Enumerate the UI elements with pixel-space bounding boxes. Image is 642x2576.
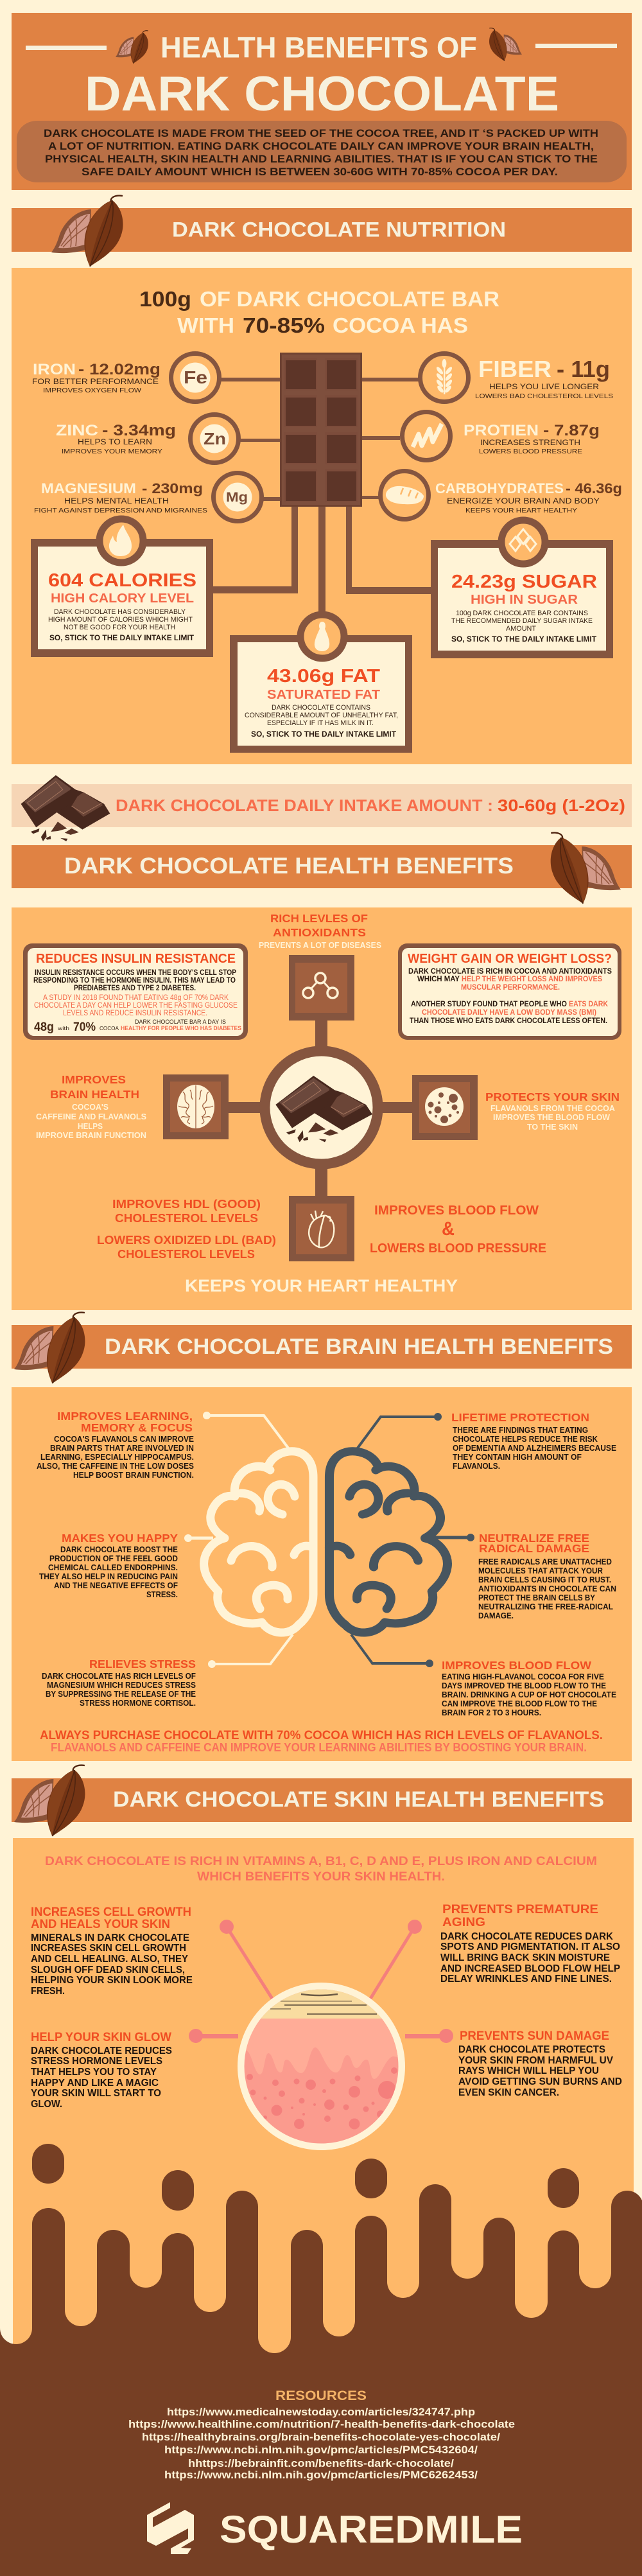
callout: fat: DARK CHOCOLATE CONTAINS: [272, 704, 370, 712]
magnesium text: MAGNESIUM: [41, 480, 136, 496]
cholesterol text: CHOLESTEROL LEVELS: [115, 1211, 258, 1225]
callout: reduces insulin resistance: INSULIN RESISTANCE OCCURS WHEN THE BODY'S CELL STOP: [35, 969, 236, 977]
text: relieves stress: MAGNESIUM WHICH REDUCES STRESS: [47, 1681, 196, 1690]
icon: zinc: Zn: [204, 429, 226, 448]
text: prevents sun damage: AVOID GETTING SUN BURNS AND: [458, 2076, 622, 2087]
carbohydrates text: - 46.36g: [566, 480, 622, 496]
heart healthy heading: KEEPS YOUR HEART HEALTHY: [185, 1276, 458, 1295]
section heading: nutrition: [12, 208, 632, 252]
text: prevents premature aging: DARK CHOCOLATE REDUCES DARK: [440, 1931, 614, 1942]
text: prevents sun damage: DARK CHOCOLATE PROTECTS: [458, 2044, 605, 2055]
text: neutralize free radical damage: FREE RADICALS ARE UNATTACHED: [478, 1557, 612, 1566]
skin protection text: [485, 1091, 620, 1132]
text: increases cell growth: INCREASES CELL GROWTH: [31, 1906, 191, 1919]
brain health text: BRAIN HEALTH: [50, 1088, 139, 1101]
callout: weight gain or weight loss: WEIGHT GAIN OR WEIGHT LOSS?: [408, 952, 612, 966]
callout: sugar: 24.23g SUGAR: [451, 572, 597, 592]
callout: fat: 43.06g FAT: [267, 666, 380, 687]
icon: cocoa pod skin section: [14, 1766, 85, 1836]
text: improves blood flow: BRAIN. DRINKING A CUP OF HOT CHOCOLATE: [442, 1690, 616, 1699]
callout: weight gain or weight loss: CHOCOLATE DAILY HAVE A LOW BODY MASS (BMI): [422, 1009, 596, 1017]
text: lifetime protection: OF DEMENTIA AND ALZHEIMERS BECAUSE: [453, 1444, 616, 1453]
icon: chocolate pieces: [21, 775, 110, 841]
text: improves learning: MEMORY & FOCUS: [81, 1421, 193, 1434]
takeaway text: ALWAYS PURCHASE CHOCOLATE WITH 70% COCOA WHICH HAS RICH LEVELS OF FLAVANOLS.: [40, 1729, 603, 1742]
resources: hhttps://bebrainfit.com/benefits-dark-chocolate/: [188, 2457, 454, 2469]
section heading: nutrition: DARK CHOCOLATE NUTRITION: [172, 218, 506, 241]
callout: calories: HIGH CALORY LEVEL: [51, 591, 194, 606]
icon: carbohydrates bread: [380, 471, 429, 519]
heading: 100g of dark chocolate: COCOA HAS: [333, 313, 468, 337]
text: relieves stress: DARK CHOCOLATE HAS RICH LEVELS OF: [42, 1672, 196, 1681]
logo: SquaredMile: SQUAREDMILE: [220, 2508, 523, 2551]
iron text: FOR BETTER PERFORMANCE: [32, 378, 159, 386]
icon: iron: [171, 353, 220, 402]
protein text: PROTIEN: [464, 422, 539, 439]
text: relieves stress: [42, 1658, 196, 1708]
callout: calories: [31, 519, 213, 657]
icon: cocoa pod left: [116, 31, 148, 64]
callout: fat: [230, 615, 412, 753]
icon: skin cross-section: [238, 1983, 406, 2151]
magnesium text: [34, 480, 207, 514]
callout: reduces insulin resistance: [23, 943, 248, 1040]
text: neutralize free radical damage: NEUTRALIZE FREE: [479, 1532, 589, 1545]
text: neutralize free radical damage: BRAIN CELLS CAUSING IT TO RUST.: [478, 1575, 611, 1584]
text: neutralize free radical damage: MOLECULES THAT ATTACK YOUR: [478, 1566, 603, 1575]
text: prevents sun damage: RAYS WHICH WILL HELP YOU: [458, 2065, 599, 2076]
text: improves blood flow: DAYS IMPROVED THE BLOOD FLOW TO THE: [442, 1681, 606, 1690]
section heading: health benefits: DARK CHOCOLATE HEALTH BENEFITS: [64, 854, 514, 879]
icon: heart square: [289, 1196, 354, 1261]
icon: magnesium: [213, 473, 262, 521]
callout: reduces insulin resistance: DARK CHOCOLATE BAR A DAY IS: [135, 1019, 226, 1026]
resources: https://www.ncbi.nlm.nih.gov/pmc/articles/PMC5432604/: [164, 2444, 478, 2456]
icon: brain left half: [204, 1451, 313, 1633]
magnesium text: - 230mg: [142, 480, 203, 496]
callout: reduces insulin resistance: COCOA: [100, 1025, 119, 1031]
iron text: IMPROVES OXYGEN FLOW: [43, 387, 141, 394]
text: improves learning: IMPROVES LEARNING,: [57, 1410, 193, 1423]
callout: reduces insulin resistance: RESPONDING TO THE HORMONE INSULIN. THIS MAY LEAD TO: [33, 977, 236, 985]
icon: cocoa pod right: [489, 28, 522, 61]
text: neutralize free radical damage: ANTIOXIDANTS IN CHOCOLATE CAN: [478, 1584, 616, 1593]
cholesterol text: [97, 1197, 276, 1261]
brain health text: IMPROVES: [62, 1073, 126, 1086]
title line one: HEALTH BENEFITS OF: [160, 31, 477, 64]
text: improves learning: COCOA'S FLAVANOLS CAN IMPROVE: [54, 1435, 194, 1444]
callout lines right: [351, 1413, 474, 1667]
heading: 100g of dark chocolate: 70-85%: [243, 313, 325, 337]
carbohydrates text: CARBOHYDRATES: [435, 480, 564, 496]
footer: melting chocolate: [0, 2144, 642, 2576]
callout: calories: 604 CALORIES: [48, 570, 196, 591]
text: improves learning: BRAIN PARTS THAT ARE INVOLVED IN: [50, 1444, 194, 1453]
text: help your skin glow: HELP YOUR SKIN GLOW: [31, 2031, 171, 2044]
iron text: - 12.02mg: [78, 361, 160, 378]
text: lifetime protection: FLAVANOLS.: [453, 1462, 500, 1471]
text: makes you happy: CHEMICAL CALLED ENDORPHINS.: [48, 1563, 178, 1572]
icon: chocolate bar: [280, 353, 362, 507]
text: neutralize free radical damage: RADICAL DAMAGE: [479, 1542, 589, 1555]
text: prevents premature aging: AGING: [442, 1916, 485, 1929]
section heading: health benefits: [12, 833, 632, 904]
callout: fat: ESPECIALLY IF IT HAS MILK IN IT.: [267, 719, 374, 727]
callout lines left: [184, 1412, 293, 1668]
brain health text: COCOA'S: [72, 1103, 108, 1112]
callout: calories: SO, STICK TO THE DAILY INTAKE LIMIT: [49, 633, 195, 642]
text: improves learning: HELP BOOST BRAIN FUNCTION.: [73, 1471, 194, 1480]
skin protection text: IMPROVES THE BLOOD FLOW: [493, 1113, 610, 1122]
callout: calories: NOT BE GOOD FOR YOUR HEALTH: [64, 624, 175, 631]
text: neutralize free radical damage: NEUTRALIZING THE FREE-RADICAL: [478, 1602, 613, 1611]
text: makes you happy: PRODUCTION OF THE FEEL GOOD: [49, 1554, 178, 1563]
heading: 100g of dark chocolate: 100g: [139, 287, 191, 311]
intro text: [45, 1855, 597, 1884]
text: improves blood flow: CAN IMPROVE THE BLOOD FLOW TO THE: [442, 1699, 597, 1708]
panel: nutrition: [12, 268, 632, 764]
text: help your skin glow: DARK CHOCOLATE REDUCES: [31, 2046, 172, 2056]
fiber text: HELPS YOU LIVE LONGER: [489, 383, 599, 391]
icon: brain square: [163, 1074, 229, 1139]
callout: reduces insulin resistance: 70%: [73, 1021, 96, 1034]
text: improves blood flow: BRAIN FOR 2 TO 3 HOURS.: [442, 1708, 541, 1717]
icon: cocoa pod nutrition: [51, 196, 123, 267]
text: neutralize free radical damage: DAMAGE.: [478, 1611, 514, 1620]
icon: fiber wheat: [420, 353, 469, 402]
text: lifetime protection: THEY CONTAIN HIGH AMOUNT OF: [453, 1453, 582, 1462]
callout: weight gain or weight loss: ANOTHER STUDY FOUND THAT PEOPLE WHO: [411, 1001, 567, 1008]
fiber text: FIBER: [478, 356, 551, 382]
banner: daily intake amount: DARK CHOCOLATE DAILY INTAKE AMOUNT :: [116, 796, 493, 815]
icon: cocoa pod brain section: [14, 1313, 85, 1383]
section heading: skin health: [12, 1778, 632, 1822]
text: increases cell growth: [31, 1906, 193, 1997]
resources: https://www.healthline.com/nutrition/7-health-benefits-dark-chocolate: [128, 2418, 515, 2430]
antioxidants text: RICH LEVLES OF: [270, 912, 368, 925]
banner: daily intake amount: 30-60g (1-2Oz): [498, 796, 625, 815]
callout: weight gain or weight loss: THAN THOSE WHO EATS DARK CHOCOLATE LESS OFTEN.: [410, 1017, 607, 1025]
callout: weight gain or weight loss: HELP THE WEIGHT LOSS AND IMPROVES: [462, 976, 602, 983]
magnesium text: HELPS MENTAL HEALTH: [64, 498, 169, 505]
callout: calories: DARK CHOCOLATE HAS CONSIDERABLY: [54, 608, 186, 616]
text: increases cell growth: SLOUGH OFF DEAD SKIN CELLS,: [31, 1965, 185, 1976]
blood flow text: IMPROVES BLOOD FLOW: [374, 1204, 539, 1218]
iron text: IRON: [33, 361, 76, 378]
text: lifetime protection: LIFETIME PROTECTION: [451, 1411, 589, 1424]
text: lifetime protection: THERE ARE FINDINGS THAT EATING: [453, 1426, 588, 1435]
text: help your skin glow: [31, 2031, 172, 2110]
callout: sugar: AMOUNT: [506, 625, 536, 633]
callout: weight gain or weight loss: WHICH MAY: [417, 976, 460, 983]
text: relieves stress: BY SUPPRESSING THE RELEASE OF THE: [46, 1690, 196, 1699]
text: increases cell growth: AND HEALS YOUR SKIN: [31, 1918, 170, 1931]
text: improves learning: LEARNING, ESPECIALLY HIPPOCAMPUS.: [40, 1453, 194, 1462]
callout: reduces insulin resistance: CHOCOLATE A DAY CAN HELP LOWER THE FASTING GLUCOSE: [34, 1002, 238, 1010]
callout: weight gain or weight loss: EATS DARK: [569, 1001, 609, 1008]
icon: protein strand: [402, 412, 451, 460]
takeaway text: [40, 1729, 603, 1754]
callout: sugar: [431, 520, 613, 658]
callout connector lines: [189, 1920, 453, 2043]
brain health text: IMPROVE BRAIN FUNCTION: [36, 1131, 146, 1140]
text: help your skin glow: STRESS HORMONE LEVELS: [31, 2056, 162, 2067]
text: help your skin glow: HAPPY AND LIKE A MAGIC: [31, 2078, 159, 2089]
callout: sugar: 100g DARK CHOCOLATE BAR CONTAINS: [456, 609, 588, 617]
resources: https://www.medicalnewstoday.com/articles/324747.php: [167, 2406, 475, 2418]
callout: calories: HIGH AMOUNT OF CALORIES WHICH MIGHT: [48, 616, 193, 624]
fiber text: - 11g: [557, 356, 610, 382]
antioxidants text: PREVENTS A LOT OF DISEASES: [259, 941, 381, 950]
fiber text: LOWERS BAD CHOLESTEROL LEVELS: [475, 392, 613, 400]
brain health text: [36, 1073, 146, 1140]
text: neutralize free radical damage: [478, 1532, 616, 1620]
icon: zinc: [190, 415, 239, 462]
resources: https://healthybrains.org/brain-benefits-chocolate-yes-chocolate/: [142, 2431, 500, 2443]
text: increases cell growth: AND CELL HEALING. ALSO, THEY: [31, 1954, 189, 1965]
callout: weight gain or weight loss: MUSCULAR PERFORMANCE.: [461, 984, 560, 992]
callout: fat: CONSIDERABLE AMOUNT OF UNHEALTHY FAT,: [245, 712, 398, 719]
callout: reduces insulin resistance: A STUDY IN 2018 FOUND THAT EATING 48g OF 70% DARK: [43, 994, 229, 1002]
callout: sugar: HIGH IN SUGAR: [471, 593, 578, 607]
icon: iron: Fe: [184, 367, 207, 387]
title line two: DARK CHOCOLATE: [85, 67, 559, 121]
text: prevents premature aging: WILL BRING BACK SKIN MOISTURE: [440, 1952, 610, 1963]
text: relieves stress: STRESS HORMONE CORTISOL.: [80, 1699, 196, 1708]
text: prevents premature aging: DELAY WRINKLES AND FINE LINES.: [440, 1974, 612, 1985]
carbohydrates text: [435, 480, 622, 514]
skin protection text: PROTECTS YOUR SKIN: [485, 1091, 620, 1103]
zinc text: ZINC: [56, 422, 98, 439]
intro text block: SAFE DAILY AMOUNT WHICH IS BETWEEN 30-60G WITH 70-85% COCOA PER DAY.: [82, 166, 558, 178]
text: makes you happy: DARK CHOCOLATE BOOST THE: [60, 1545, 178, 1554]
antioxidants text: ANTIOXIDANTS: [273, 926, 366, 939]
zinc text: - 3.34mg: [102, 422, 176, 439]
protein text: LOWERS BLOOD PRESSURE: [479, 448, 582, 455]
connectors: [228, 1021, 413, 1198]
intro text block: DARK CHOCOLATE IS MADE FROM THE SEED OF THE COCOA TREE, AND IT ‘S PACKED UP WITH: [44, 128, 598, 139]
carbohydrates text: KEEPS YOUR HEART HEALTHY: [465, 507, 577, 514]
text: prevents sun damage: EVEN SKIN CANCER.: [458, 2087, 559, 2098]
icon: cocoa pod: [551, 833, 621, 904]
cholesterol text: IMPROVES HDL (GOOD): [112, 1197, 261, 1211]
brain health text: HELPS: [78, 1122, 103, 1131]
callout: reduces insulin resistance: LEVELS AND REDUCE INSULIN RESISTANCE.: [63, 1010, 207, 1017]
intro text: WHICH BENEFITS YOUR SKIN HEALTH.: [197, 1870, 445, 1884]
text: neutralize free radical damage: PROTECT THE BRAIN CELLS BY: [478, 1593, 596, 1602]
section heading: brain health: [12, 1325, 632, 1369]
section heading: brain health: DARK CHOCOLATE BRAIN HEALTH BENEFITS: [105, 1335, 613, 1359]
intro text block: A LOT OF NUTRITION. EATING DARK CHOCOLATE DAILY CAN IMPROVE YOUR BRAIN HEALTH,: [48, 141, 594, 152]
protein text: [464, 422, 600, 455]
intro text block: [17, 121, 627, 182]
magnesium text: FIGHT AGAINST DEPRESSION AND MIGRAINES: [34, 507, 207, 514]
cholesterol text: LOWERS OXIDIZED LDL (BAD): [97, 1233, 276, 1247]
text: increases cell growth: INCREASES SKIN CELL GROWTH: [31, 1943, 186, 1954]
heading: 100g of dark chocolate: WITH: [177, 313, 234, 337]
zinc text: [56, 422, 176, 455]
heading: 100g of dark chocolate: [139, 287, 499, 337]
intro text: DARK CHOCOLATE IS RICH IN VITAMINS A, B1, C, D AND E, PLUS IRON AND CALCIUM: [45, 1855, 597, 1868]
antioxidants text: [259, 912, 381, 950]
text: makes you happy: THEY ALSO HELP IN REDUCING PAIN: [39, 1572, 178, 1581]
resources: RESOURCES: [275, 2388, 367, 2403]
text: help your skin glow: THAT HELPS YOU TO STAY: [31, 2067, 157, 2078]
callout: reduces insulin resistance: with: [57, 1026, 69, 1031]
callout: reduces insulin resistance: REDUCES INSULIN RESISTANCE: [36, 952, 236, 966]
panel: skin health: [13, 1838, 634, 2376]
text: increases cell growth: MINERALS IN DARK CHOCOLATE: [31, 1932, 189, 1943]
text: makes you happy: STRESS.: [146, 1590, 178, 1599]
intro text block: PHYSICAL HEALTH, SKIN HEALTH AND LEARNING ABILITIES. THAT IS IF YOU CAN STICK TO THE: [45, 153, 598, 165]
resources: [128, 2388, 515, 2481]
text: prevents premature aging: PREVENTS PREMATURE: [442, 1903, 598, 1916]
protein text: - 7.87g: [543, 422, 600, 439]
cholesterol text: CHOLESTEROL LEVELS: [117, 1247, 255, 1261]
text: makes you happy: [39, 1532, 178, 1599]
section heading: skin health: DARK CHOCOLATE SKIN HEALTH BENEFITS: [113, 1787, 604, 1812]
callout: sugar: SO, STICK TO THE DAILY INTAKE LIMIT: [451, 635, 597, 644]
logo: SquaredMile: [147, 2502, 523, 2554]
text: improves learning: ALSO, THE CAFFEINE IN THE LOW DOSES: [37, 1462, 194, 1471]
callout: reduces insulin resistance: 48g: [34, 1021, 54, 1034]
protein text: INCREASES STRENGTH: [480, 439, 580, 447]
text: help your skin glow: YOUR SKIN WILL START TO: [31, 2088, 161, 2099]
text: improves learning: [37, 1410, 194, 1480]
text: prevents premature aging: [440, 1903, 620, 1985]
text: prevents sun damage: [458, 2029, 622, 2098]
zinc text: HELPS TO LEARN: [78, 439, 152, 446]
callout: sugar: THE RECOMMENDED DAILY SUGAR INTAKE: [451, 617, 593, 625]
text: prevents sun damage: PREVENTS SUN DAMAGE: [460, 2029, 609, 2043]
text: prevents premature aging: SPOTS AND PIGMENTATION. IT ALSO: [440, 1941, 620, 1952]
text: improves blood flow: EATING HIGH-FLAVANOL COCOA FOR FIVE: [442, 1672, 604, 1681]
text: lifetime protection: [451, 1411, 616, 1471]
zinc text: IMPROVES YOUR MEMORY: [62, 448, 162, 455]
icon: brain right half: [329, 1451, 447, 1633]
connector lines: [213, 378, 431, 613]
panel: brain health: [12, 1387, 632, 1761]
skin protection text: TO THE SKIN: [527, 1123, 578, 1132]
callout: fat: SO, STICK TO THE DAILY INTAKE LIMIT: [251, 730, 397, 739]
icon: magnesium: Mg: [226, 490, 248, 505]
text: makes you happy: MAKES YOU HAPPY: [62, 1532, 178, 1545]
callout: weight gain or weight loss: [398, 943, 621, 1040]
iron text: [32, 361, 160, 394]
text: improves blood flow: [442, 1659, 616, 1717]
blood flow text: &: [442, 1218, 455, 1240]
fiber text: [475, 356, 613, 400]
text: help your skin glow: GLOW.: [31, 2099, 62, 2110]
text: relieves stress: RELIEVES STRESS: [89, 1658, 196, 1670]
callout: fat: SATURATED FAT: [267, 688, 380, 702]
panel: header: [12, 13, 632, 190]
banner: daily intake amount: [12, 775, 632, 841]
callout: reduces insulin resistance: HEALTHY FOR PEOPLE WHO HAS DIABETES: [121, 1025, 241, 1032]
skin protection text: FLAVANOLS FROM THE COCOA: [490, 1104, 615, 1113]
blood flow text: [370, 1204, 546, 1256]
text: increases cell growth: HELPING YOUR SKIN LOOK MORE: [31, 1975, 193, 1986]
text: makes you happy: AND THE NEGATIVE EFFECTS OF: [54, 1581, 178, 1590]
callout: reduces insulin resistance: PREDIABETES AND TYPE 2 DIABETES.: [74, 985, 196, 992]
text: prevents premature aging: AND INCREASED BLOOD FLOW HELP: [440, 1963, 620, 1974]
icon: antioxidant molecule: [289, 955, 354, 1021]
callout: weight gain or weight loss: DARK CHOCOLATE IS RICH IN COCOA AND ANTIOXIDANTS: [408, 968, 612, 976]
text: improves blood flow: IMPROVES BLOOD FLOW: [442, 1659, 592, 1672]
resources: https://www.ncbi.nlm.nih.gov/pmc/articles/PMC6262453/: [164, 2469, 478, 2481]
text: increases cell growth: FRESH.: [31, 1986, 65, 1997]
brain health text: CAFFEINE AND FLAVANOLS: [36, 1112, 146, 1121]
text: prevents sun damage: YOUR SKIN FROM HARMFUL UV: [458, 2055, 614, 2066]
blood flow text: LOWERS BLOOD PRESSURE: [370, 1241, 546, 1256]
icon: central chocolate circle: [259, 1046, 383, 1169]
takeaway text: FLAVANOLS AND CAFFEINE CAN IMPROVE YOUR LEARNING ABILITIES BY BOOSTING YOUR BRAIN.: [51, 1741, 587, 1754]
icon: skin cell square: [412, 1075, 478, 1140]
carbohydrates text: ENERGIZE YOUR BRAIN AND BODY: [447, 498, 600, 505]
heading: 100g of dark chocolate: OF DARK CHOCOLATE BAR: [200, 287, 499, 311]
text: lifetime protection: CHOCOLATE HELPS REDUCE THE RISK: [453, 1435, 598, 1444]
panel: health benefits: [12, 907, 632, 1310]
